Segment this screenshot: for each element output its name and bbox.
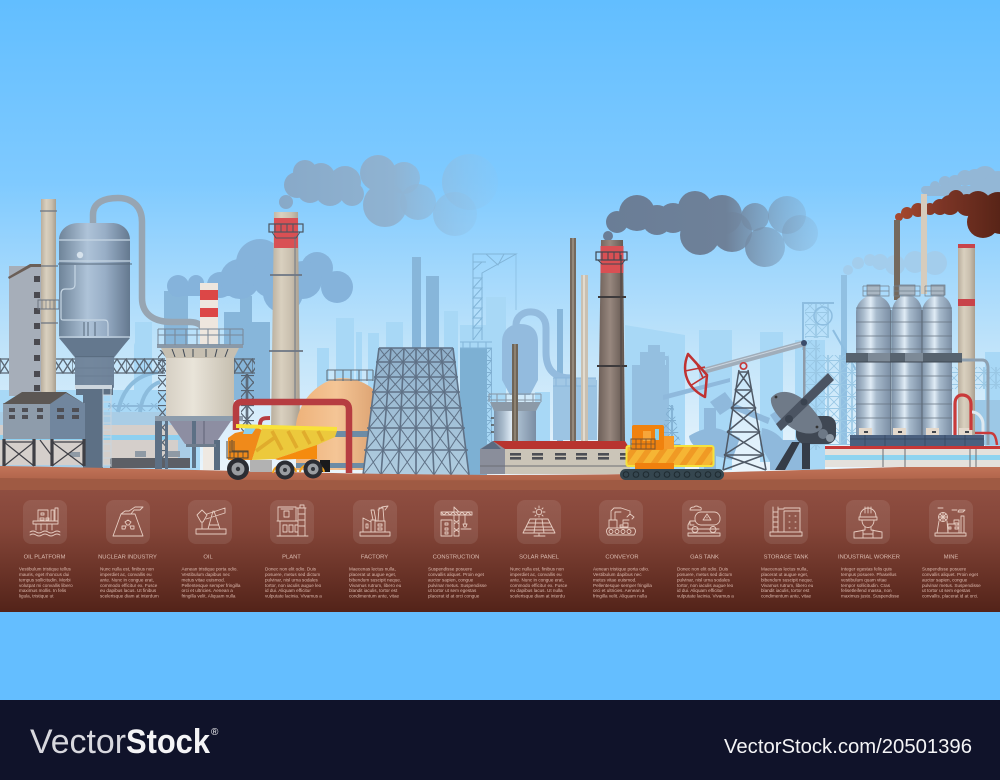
small silver tank with railing and pole	[489, 344, 541, 441]
description text columns: Vestibulum dapibus nec	[182, 572, 231, 577]
icon tile row	[23, 500, 973, 544]
description text columns: Donec non elit odio. Duis	[677, 566, 729, 572]
description text columns: auctor sapien, congue	[922, 578, 968, 582]
icon labels: GAS TANK	[690, 554, 719, 560]
description text columns: vestibulum quam vitae	[841, 578, 887, 582]
description text columns: tempor sollicitudin. Cras	[841, 583, 891, 588]
description text columns: felisetleifend massa, non	[841, 588, 892, 593]
red and white chimney	[200, 283, 218, 345]
icon: oil platform	[30, 508, 60, 536]
background mine tower silhouette	[803, 275, 1000, 450]
description text columns: tempus posuere. Phasellus	[841, 572, 897, 577]
description text columns: tempus sollicitudin. Morbi	[19, 578, 71, 582]
icon labels: STORAGE TANK	[764, 554, 809, 560]
low factory building with red roof	[480, 441, 630, 474]
description text columns: id dui. Aliquam efficitur	[677, 588, 723, 593]
description text columns: Vivamus rutrum, libero eu	[761, 583, 814, 588]
conveyor crawler	[620, 425, 724, 480]
description text columns: Donec non elit odio. Duis	[265, 566, 317, 572]
icon: worker	[854, 507, 882, 538]
icon labels: CONVEYOR	[605, 554, 639, 560]
description text columns: metus vitae euismod.	[182, 578, 225, 582]
description text columns: tortor, non iaculis augue leo	[677, 583, 734, 588]
background blue tower with railing	[460, 342, 492, 475]
description text columns: placerat ut augue eget,	[349, 572, 396, 577]
description text columns: Pellentesque semper fringilla	[593, 583, 652, 588]
description text columns: blandit iaculis, tortor est	[761, 588, 810, 593]
icon: storage tank	[770, 507, 802, 536]
icon labels: OIL	[203, 554, 213, 560]
tall thin poles	[570, 238, 588, 441]
main smoke plume dark grey	[603, 191, 818, 267]
dump truck	[227, 424, 337, 480]
description text columns: vulputate lacinia. Vivamus a	[677, 594, 734, 598]
description text columns: posuere, metus sed dictum	[677, 572, 732, 577]
icon: factory	[360, 506, 390, 536]
description text columns: Nunc nulla est, finibus non	[510, 566, 564, 572]
horizontal truss bridge	[0, 358, 165, 374]
description text columns: condimentum ante, vitae	[761, 594, 811, 598]
description text columns: imperdiet ac, convallis eu	[510, 572, 562, 577]
description text columns: Vestibulum dapibus nec	[593, 572, 642, 577]
description text columns: Nunc nulla est, finibus non	[100, 566, 154, 572]
grey pipe right	[950, 360, 988, 445]
description text columns: scelerisque diam at interdu	[510, 594, 565, 598]
panel: mine	[929, 500, 973, 544]
panel: gas tank	[682, 500, 726, 544]
description text columns: bibendum suscipit neque.	[761, 578, 813, 582]
description text columns: auctor sapien, congue	[428, 578, 474, 582]
blue strip below panel	[0, 612, 1000, 700]
red pipes	[236, 402, 349, 473]
icon labels: PLANT	[282, 554, 301, 560]
description text columns: Vestibulum tristique tellus	[19, 566, 72, 572]
description text columns: posuere, metus sed dictum	[265, 572, 320, 577]
description text columns: fringilla velit. Aliquam nulla	[182, 594, 236, 598]
truss behind cream silo	[158, 350, 255, 465]
description text columns: Integer egestas felis quis	[841, 566, 893, 572]
footer bar	[0, 700, 1000, 780]
description text columns: commodo efficitur ex. Fusce	[100, 583, 158, 588]
right beige chimney	[958, 244, 975, 439]
description text columns: tortor, non iaculis augue leo	[265, 583, 322, 588]
footer logo: Vector	[30, 723, 126, 761]
sky background	[0, 0, 1000, 480]
description text columns: pulvinar metus. Suspendisse	[428, 583, 487, 588]
description text columns: orci et ultricies. Aenean a	[182, 588, 233, 593]
description text columns: imperdiet ac, convallis eu	[100, 572, 152, 577]
industrial scene and information panel	[0, 0, 1000, 612]
background pumpjack silhouettes	[658, 378, 810, 470]
icon: conveyor robot	[606, 508, 636, 535]
description text columns: maximus justo. Suspendisse	[841, 594, 900, 598]
description text columns: ut tortor ut sem egestas	[428, 588, 477, 593]
pale building strip left	[0, 412, 190, 468]
description text columns: scelerisque diam at interdum	[100, 594, 159, 598]
smoke pale top right	[921, 166, 1000, 199]
description text columns: mauris, eget rhoncus dui	[19, 572, 69, 577]
description text columns: pulvinar, nisl urna sodales	[265, 578, 319, 582]
panel: conveyor	[599, 500, 643, 544]
background plant silhouette right of chimney	[632, 345, 669, 445]
description text columns: vulputate lacinia. Vivamus a	[265, 594, 322, 598]
red U pipe	[955, 395, 997, 445]
description text columns: convallis. placerat id at orci.	[922, 594, 978, 598]
panel: nuclear industry	[106, 500, 150, 544]
lattice cooling tower	[363, 348, 469, 475]
beige chimney left	[38, 199, 59, 394]
orange spherical tank	[296, 370, 377, 470]
cream silo with funnel	[155, 329, 243, 470]
icon: plant building	[277, 505, 308, 536]
panel: storage tank	[764, 500, 808, 544]
icon: solar panel	[523, 506, 555, 536]
description text columns: maximus mollis. In felis	[19, 588, 67, 593]
soil panel	[0, 490, 1000, 612]
mid-blue background towers	[164, 257, 563, 441]
footer logo	[30, 723, 219, 761]
description text columns: bibendum suscipit neque.	[349, 578, 401, 582]
description text columns: pulvinar metus. Suspendisse	[922, 583, 981, 588]
three silver storage tanks	[846, 285, 972, 436]
description text columns: volutpat mi convallis libero	[19, 583, 73, 588]
panel: oil	[188, 500, 232, 544]
description text columns: Maecenas lectus nulla,	[349, 566, 396, 572]
panel: plant	[270, 500, 314, 544]
right thin poles	[894, 194, 927, 300]
description text columns: Suspendisse posuere	[428, 566, 473, 572]
footer logo: Stock	[126, 723, 210, 761]
tall beige chimney with red band	[269, 212, 303, 430]
brown chimney with red band	[596, 240, 627, 441]
icon: crane	[441, 507, 472, 536]
description text columns: fringilla velit. Aliquam nulla	[593, 594, 647, 598]
pipe over silo	[93, 198, 204, 330]
description text columns: Maecenas lectus nulla,	[761, 566, 808, 572]
description text columns: blandit iaculis, tortor est	[349, 588, 398, 593]
far skyline silhouettes	[0, 297, 1000, 470]
ground top band	[0, 464, 1000, 482]
footer image id: VectorStock.com/20501396	[724, 736, 972, 758]
description text columns: orci et ultricies. Aenean a	[593, 588, 645, 593]
oil pumpjack	[685, 340, 836, 470]
description text columns: Vivamus rutrum, libero eu	[349, 583, 402, 588]
footer logo: ®	[211, 727, 219, 738]
background smoke: pale plume behind tanks	[843, 251, 947, 275]
description text columns: ut tortor ut sem egestas	[922, 588, 971, 593]
description text columns: Aenean tristique porta odio.	[593, 566, 649, 572]
description text columns: convallis aliquet. Proin eget	[428, 572, 485, 577]
panel: oil platform	[23, 500, 67, 544]
panel: construction	[434, 500, 478, 544]
description text columns: eu dapibus lacus. Ut finibus	[100, 588, 157, 593]
description text columns: Suspendisse posuere	[922, 566, 967, 572]
panel: solar panel	[517, 500, 561, 544]
icon labels: NUCLEAR INDUSTRY	[98, 554, 157, 560]
panel: industrial worker	[846, 500, 890, 544]
description text columns: ligula, tristique ut	[19, 594, 54, 598]
background silo and pipe silhouette	[502, 312, 597, 440]
icon labels: SOLAR PANEL	[519, 554, 560, 560]
description text columns: convallis aliquet. Proin eget	[922, 572, 979, 577]
description text columns: metus vitae euismod.	[593, 578, 636, 582]
description text columns: placerat id at orci congue	[428, 594, 480, 598]
icon labels	[24, 554, 958, 560]
main smoke plume top centre	[279, 154, 498, 236]
panel: factory	[353, 500, 397, 544]
description text columns: eu dapibus lacus. Ut nulla	[510, 588, 563, 593]
description text columns: placerat ut augue eget,	[761, 572, 808, 577]
icon labels: CONSTRUCTION	[433, 554, 479, 560]
grey tall building	[8, 264, 43, 396]
ground lower band	[0, 478, 1000, 492]
low warehouse on stilts	[3, 392, 85, 466]
icon: cooling tower	[113, 507, 143, 536]
description text columns: id dui. Aliquam efficitur	[265, 588, 311, 593]
description text columns: commodo efficitur ex. Fusce	[510, 583, 568, 588]
icon labels: FACTORY	[361, 554, 388, 560]
description text columns: Pellentesque semper fringilla	[182, 583, 241, 588]
description text columns: Aenean tristique porta odio.	[182, 566, 238, 572]
description text columns: pulvinar, nisl urna sodales	[677, 578, 731, 582]
tank base and platform	[825, 435, 1000, 467]
icon: oil pump	[196, 508, 226, 534]
background crane silhouette	[473, 254, 516, 340]
description text columns: ante. Nunc in congue erat,	[510, 578, 564, 582]
description text columns: ante. Nunc in congue erat,	[100, 578, 154, 582]
icon: gas truck	[688, 506, 720, 536]
background smoke: pale blue plume	[167, 239, 353, 313]
pale arch truss	[108, 372, 160, 412]
icon labels: MINE	[944, 554, 958, 560]
icon: mine	[935, 508, 966, 536]
smoke brown right	[895, 190, 1000, 238]
icon labels: OIL PLATFORM	[24, 554, 66, 560]
big steel silo	[58, 223, 132, 468]
description text columns: condimentum ante, vitae	[349, 594, 399, 598]
description text columns	[19, 566, 981, 598]
icon labels: INDUSTRIAL WORKER	[838, 554, 900, 560]
